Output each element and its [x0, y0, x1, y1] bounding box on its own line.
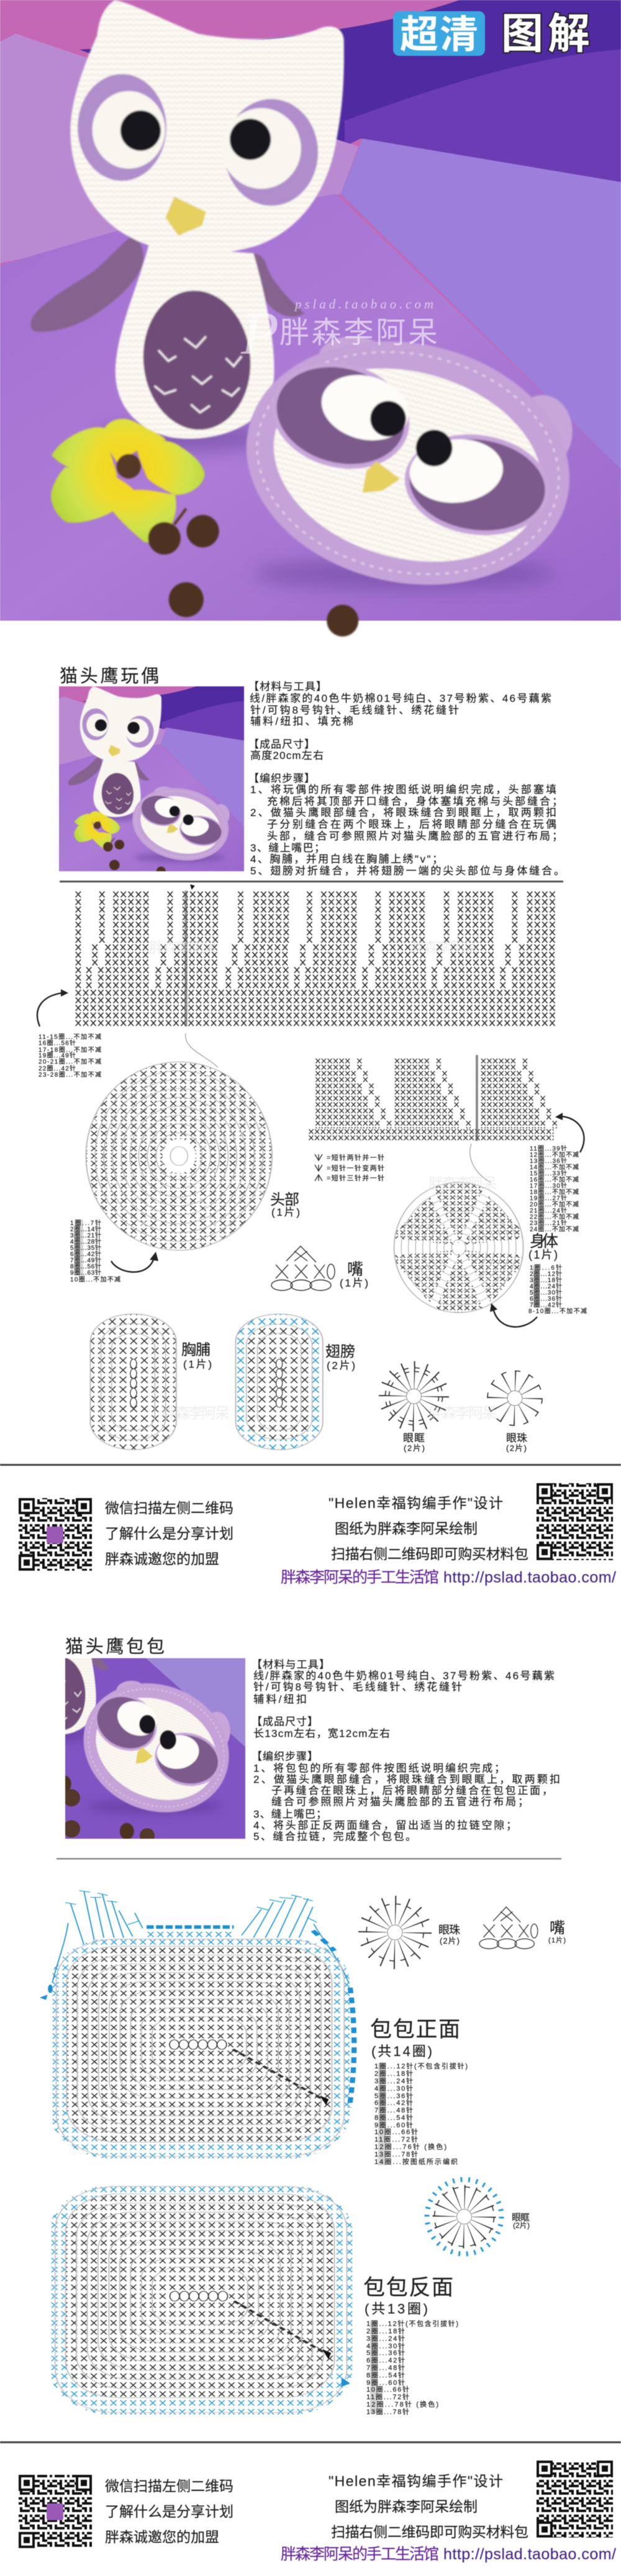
left promo text: 了解什么是分享计划 — [105, 2503, 233, 2520]
QR code: right — [537, 2461, 613, 2538]
list: body rounds 11-24: 19圈...27针 — [530, 1194, 567, 1202]
list: body rounds 11-24: 23圈...21针 — [530, 1219, 567, 1227]
left promo text — [105, 1500, 233, 1567]
label: 嘴 — [548, 1919, 566, 1944]
materials and steps text — [252, 1659, 560, 1842]
diagram watermarks: 胖森李阿呆 — [161, 1405, 230, 1422]
label: 头部: 头部 — [270, 1192, 299, 1208]
label: 翅膀: (2片) — [327, 1360, 355, 1371]
list: pouch back rounds: 6圈...42针 — [366, 2356, 405, 2364]
list: body rounds 1-10: 8-10圈...不加不减 — [528, 1308, 587, 1315]
diagram watermarks — [149, 940, 497, 1422]
stitch legend — [315, 1153, 384, 1182]
list: head rounds 11-28 — [39, 1033, 101, 1079]
pouch front ears — [52, 1891, 348, 1983]
mouth diagram — [271, 1246, 335, 1291]
chart: wing piece — [235, 1314, 323, 1450]
list: head rounds 11-28: 19圈...49针 — [39, 1051, 76, 1059]
list: pouch front rounds: 14圈...按图纸所示编织 — [374, 2157, 458, 2166]
arrowhead: grid start — [61, 989, 68, 997]
materials and steps text: 【成品尺寸】 — [248, 738, 315, 750]
arrowhead: body chart — [490, 1303, 497, 1312]
arrow: to body chart — [494, 1311, 537, 1327]
materials and steps text: 【材料与工具】 — [252, 1659, 330, 1671]
list: body rounds 11-24: 22圈...不加不减 — [530, 1213, 579, 1221]
list: head rounds 11-28: 11-15圈...不加不减 — [39, 1033, 101, 1041]
label: 翅膀 — [325, 1344, 355, 1371]
list: pouch front rounds: 5圈...36针 — [374, 2091, 413, 2100]
list: pouch front rounds: 1圈...12针(不包含引拔针) — [374, 2062, 468, 2070]
list: body rounds 1-10: 3圈...18针 — [530, 1276, 562, 1284]
hero photo: crochet owl toy and owl pouch — [0, 0, 621, 637]
label: 头部: (1片) — [271, 1206, 300, 1218]
footer promo block 2 — [19, 2461, 616, 2563]
list: head rounds 1-10: 6圈...42针 — [70, 1250, 101, 1258]
materials and steps text: 高度20cm左右 — [250, 750, 324, 761]
connector: grid to head chart — [186, 1033, 218, 1067]
list: body rounds 11-24: 18圈...不加不减 — [530, 1188, 579, 1196]
title: 包包反面: 包包反面 — [363, 2276, 453, 2300]
right promo text: 图纸为胖森李阿呆绘制 — [335, 2498, 478, 2515]
right promo text — [329, 2473, 528, 2540]
list: pouch back rounds: 11圈...72针 — [366, 2392, 409, 2401]
list: body rounds 11-24: 11圈...39针 — [530, 1144, 567, 1152]
label: 眼眶: 眼眶 — [512, 2212, 530, 2223]
list: head rounds 1-10: 3圈...21针 — [70, 1231, 101, 1239]
label: 眼眶: (2片) — [404, 1443, 425, 1453]
chart: eyeball — [487, 1371, 542, 1425]
list: head rounds 1-10: 1圈...7针 — [70, 1219, 101, 1227]
front eyeball with stitches — [361, 1898, 429, 1967]
panel: owl toy instructions — [59, 666, 564, 877]
list: pouch back rounds: 1圈...12针(不包含引拔针) — [366, 2319, 458, 2328]
list: pouch front rounds: 2圈...18针 — [374, 2069, 413, 2078]
photo watermark: pslad.taobao.com — [294, 297, 433, 312]
right promo text — [329, 1495, 528, 1562]
label: 嘴: (1片) — [340, 1277, 368, 1289]
list: body rounds 11-24: 21圈...24针 — [530, 1206, 567, 1214]
materials and steps text: 3、缝上嘴巴； — [250, 842, 325, 854]
list: head rounds 11-28: 20-21圈...不加不减 — [39, 1058, 101, 1066]
list: body rounds 11-24 — [530, 1144, 579, 1233]
chart: chest piece — [90, 1314, 176, 1450]
pouch photo — [65, 1658, 246, 1839]
left promo text: 胖森诚邀您的加盟 — [105, 2529, 219, 2545]
label: 眼珠: (2片) — [440, 1936, 460, 1945]
materials and steps text: 【材料与工具】 — [248, 681, 327, 693]
list: pouch front rounds: 7圈...48针 — [374, 2106, 413, 2114]
stitch legend: =短针一针变两针 — [327, 1164, 384, 1172]
label: 眼珠: 眼珠 — [438, 1924, 460, 1936]
photo watermark: 胖森李阿呆 — [279, 316, 438, 349]
QR code: right — [537, 1483, 613, 1560]
label: 眼眶: (2片) — [513, 2221, 530, 2230]
list: body rounds 1-10: 7圈...42针 — [530, 1301, 562, 1309]
label: 头部 — [270, 1192, 300, 1218]
materials and steps text: 线/胖森家的40色牛奶棉01号纯白、37号粉紫、46号藕紫 — [253, 1670, 555, 1682]
list: body rounds 1-10: 6圈...36针 — [530, 1295, 562, 1303]
left promo text: 微信扫描左侧二维码 — [105, 1500, 233, 1516]
subtitle: 共14圈: (共14圈) — [371, 2044, 432, 2059]
list: pouch front rounds: 10圈...66针 — [374, 2127, 418, 2136]
badge: 超清: 超清 — [400, 14, 478, 56]
diagram watermarks: 胖森李阿呆 — [428, 1405, 497, 1422]
label: 嘴: (1片) — [548, 1936, 566, 1944]
label: 身体 — [528, 1232, 558, 1261]
right promo text: 扫描右侧二维码即可购买材料包 — [331, 2524, 528, 2540]
list: pouch front rounds: 12圈...76针 (换色) — [374, 2142, 446, 2151]
list: body rounds 11-24: 14圈...不加不减 — [530, 1164, 579, 1171]
list: head rounds 1-10: 7圈...49针 — [70, 1256, 101, 1264]
materials and steps text: 2、做猫头鹰眼部缝合，将眼珠缝合到眼眶上，取两颗扣 — [250, 807, 556, 819]
back eye socket with blue edge — [427, 2179, 502, 2254]
materials and steps text: 线/胖森家的40色牛奶棉01号纯白、37号粉紫、46号藕紫 — [250, 693, 551, 704]
list: pouch back rounds: 13圈...78针 — [366, 2407, 409, 2416]
list: head rounds 1-10 — [70, 1219, 120, 1283]
list: pouch back rounds: 9圈...60针 — [366, 2378, 405, 2387]
label: 嘴: 嘴 — [550, 1919, 565, 1937]
footer promo block 1 — [19, 1483, 616, 1586]
list: pouch back rounds: 5圈...36针 — [366, 2348, 405, 2357]
right promo text: 扫描右侧二维码即可购买材料包 — [331, 1546, 528, 1562]
chart: head round diagram — [79, 1061, 277, 1254]
label: 嘴: 嘴 — [347, 1260, 363, 1278]
materials and steps text: 4、将头部正反两面缝合，留出适当的拉链空隙； — [253, 1820, 517, 1831]
list: body rounds 11-24: 20圈...不加不减 — [530, 1201, 579, 1208]
right promo text: "Helen幸福钩编手作"设计 — [329, 2473, 503, 2489]
materials and steps text: 1、将玩偶的所有零部件按图纸说明编织完成，头部塞填 — [250, 784, 556, 796]
materials and steps text: 充棉后将其顶部开口缝合，身体塞填充棉与头部缝合； — [267, 796, 563, 807]
chart: body round diagram — [390, 1180, 528, 1314]
materials and steps text: 辅料/纽扣 — [253, 1694, 307, 1705]
materials and steps text: 【编织步骤】 — [248, 773, 315, 784]
list: pouch back rounds: 4圈...30针 — [366, 2341, 405, 2350]
chart: eye socket — [381, 1363, 447, 1429]
materials and steps text: 辅料/纽扣、填充棉 — [250, 716, 353, 727]
list: body rounds 11-24: 16圈...不加不减 — [530, 1176, 579, 1183]
diagram watermarks: 胖森李阿呆 — [149, 940, 217, 956]
label: 身体: (1片) — [528, 1249, 558, 1261]
materials and steps text: 1、将包包的所有零部件按图纸说明编织完成； — [253, 1762, 505, 1774]
panel: owl pouch instructions — [65, 1636, 560, 1842]
list: pouch back rounds: 10圈...66针 — [366, 2385, 409, 2394]
label: 眼珠: 眼珠 — [506, 1432, 527, 1444]
label: 嘴 — [340, 1260, 368, 1289]
label: 眼珠 — [438, 1924, 460, 1945]
mouth diagram — [479, 1907, 538, 1949]
materials and steps text: 【成品尺寸】 — [252, 1716, 318, 1728]
label: 身体: 身体 — [530, 1232, 558, 1250]
list: pouch front rounds: 9圈...60针 — [374, 2120, 413, 2129]
QR code: left — [19, 2475, 92, 2548]
chart: pouch back — [50, 2185, 353, 2415]
list: head rounds 11-28: 16圈...56针 — [39, 1039, 76, 1047]
materials and steps text: 子分别缝合在两个眼珠上，后将眼睛部分缝合在玩偶 — [267, 819, 556, 830]
materials and steps text: 5、缝合拉链，完成整个包包。 — [253, 1831, 416, 1842]
toy photo — [59, 686, 244, 876]
label: 翅膀: 翅膀 — [325, 1344, 355, 1360]
list: head rounds 1-10: 4圈...28针 — [70, 1237, 101, 1245]
list: body rounds 11-24: 13圈...36针 — [530, 1157, 567, 1165]
label: 胸脯 — [181, 1342, 212, 1370]
heading: 猫头鹰包包: 猫头鹰包包 — [65, 1636, 165, 1657]
title: 包包正面: 包包正面 — [370, 2017, 460, 2042]
list: pouch back rounds: 12圈...78针 (换色) — [366, 2400, 438, 2408]
list: pouch front rounds: 6圈...42针 — [374, 2098, 413, 2107]
list: body rounds 1-10: 5圈...30针 — [530, 1288, 562, 1296]
shop link: http://pslad.taobao.com/ — [443, 1569, 616, 1586]
chart: neck and body stitch grid — [75, 884, 556, 1027]
list: body rounds 11-24: 12圈...不加不减 — [530, 1151, 579, 1159]
list: pouch front rounds: 11圈...72针 — [374, 2135, 418, 2143]
label: 眼眶 — [403, 1432, 425, 1453]
list: head rounds 11-28: 22圈...42针 — [39, 1064, 76, 1072]
right promo text: 图纸为胖森李阿呆绘制 — [335, 1520, 478, 1537]
list: head rounds 1-10: 5圈...35针 — [70, 1244, 101, 1252]
materials and steps text: 针/可钩8号钩针、毛线缝针、绣花缝针 — [253, 1681, 462, 1693]
badge: 图解: 图解 — [501, 11, 590, 58]
list: body rounds 1-10: 1圈...6针 — [530, 1263, 562, 1272]
photo watermark — [240, 297, 438, 367]
label: 眼眶: 眼眶 — [403, 1432, 425, 1444]
diagram watermarks: 胖森李阿呆 — [410, 940, 478, 956]
stitch legend: =短针三针并一针 — [327, 1174, 384, 1182]
label: 眼珠: (2片) — [506, 1443, 527, 1453]
diagram watermarks: 胖森李阿呆 — [428, 1175, 497, 1192]
shop link: 胖森李阿呆的手工生活馆 — [281, 1569, 439, 1586]
stitch legend: =短针两针并一针 — [327, 1153, 384, 1162]
chart: pouch front — [40, 1891, 354, 2159]
list: head rounds 1-10: 10圈...不加不减 — [70, 1276, 120, 1283]
arrow: to body grid — [562, 1116, 584, 1152]
list: head rounds 1-10: 9圈...63针 — [70, 1268, 101, 1277]
arrowhead: body grid — [555, 1113, 563, 1120]
shop link — [281, 1569, 616, 1586]
list: body rounds 11-24: 15圈...33针 — [530, 1169, 567, 1177]
materials and steps text: 2、做猫头鹰眼部缝合，将眼珠缝合到眼眶上，取两颗扣 — [253, 1774, 560, 1785]
list: body rounds 1-10 — [528, 1263, 587, 1315]
materials and steps text: 4、胸脯，并用白线在胸脯上绣"v"； — [250, 853, 443, 865]
list: pouch front rounds — [374, 2062, 468, 2166]
materials and steps text: 针/可钩8号钩针、毛线缝针、绣花缝针 — [250, 704, 459, 716]
materials and steps text: 缝合可参照照片对猫头鹰脸部的五官进行布局； — [271, 1796, 528, 1808]
list: pouch back rounds — [366, 2319, 458, 2416]
materials and steps text: 【编织步骤】 — [252, 1751, 318, 1762]
list: head rounds 1-10: 8圈...56针 — [70, 1262, 101, 1270]
left promo text — [105, 2478, 233, 2545]
subtitle: 共13圈: (共13圈) — [365, 2301, 428, 2317]
shop link: 胖森李阿呆的手工生活馆 — [281, 2546, 439, 2563]
list: body rounds 1-10: 4圈...24针 — [530, 1282, 562, 1290]
list: pouch back rounds: 3圈...24针 — [366, 2334, 405, 2343]
arrow: to grid start — [37, 993, 62, 1026]
materials and steps text: 子再缝合在眼珠上，后将眼睛部分缝合在包包正面， — [271, 1785, 553, 1797]
left promo text: 微信扫描左侧二维码 — [105, 2478, 233, 2494]
label: 胸脯: (1片) — [183, 1358, 212, 1370]
list: body rounds 1-10: 2圈...12针 — [530, 1270, 562, 1278]
photo watermark: P — [240, 298, 279, 367]
arrowhead: head chart — [150, 1252, 158, 1261]
list: pouch back rounds: 7圈...48针 — [366, 2363, 405, 2372]
right promo text: "Helen幸福钩编手作"设计 — [329, 1495, 503, 1511]
list: pouch front rounds: 8圈...54针 — [374, 2113, 413, 2122]
list: pouch back rounds: 8圈...54针 — [366, 2371, 405, 2379]
list: body rounds 11-24: 24圈...不加不减 — [530, 1226, 579, 1233]
list: pouch front rounds: 4圈...30针 — [374, 2084, 413, 2093]
list: pouch front rounds: 13圈...78针 — [374, 2150, 418, 2158]
shop link — [281, 2546, 616, 2563]
left promo text: 胖森诚邀您的加盟 — [105, 1551, 219, 1567]
label: 胸脯: 胸脯 — [181, 1342, 211, 1358]
list: body rounds 11-24: 17圈...30针 — [530, 1182, 567, 1190]
QR code: left — [19, 1498, 92, 1571]
connector: grid to body chart — [470, 1144, 491, 1182]
list: head rounds 11-28: 23-28圈...不加不减 — [39, 1071, 101, 1079]
left promo text: 了解什么是分享计划 — [105, 1525, 233, 1542]
list: head rounds 11-28: 17-18圈...不加不减 — [39, 1046, 101, 1054]
materials and steps text: 头部，缝合可参照照片对猫头鹰脸部的五官进行布局； — [267, 830, 563, 842]
list: pouch front rounds: 3圈...24针 — [374, 2076, 413, 2085]
materials and steps text — [248, 681, 564, 877]
label: 眼眶 — [512, 2212, 530, 2230]
heading: 猫头鹰玩偶: 猫头鹰玩偶 — [60, 666, 159, 686]
arrow: to head chart — [111, 1260, 153, 1272]
materials and steps text: 3、缝上嘴巴； — [253, 1808, 327, 1820]
label: 眼珠 — [506, 1432, 527, 1453]
shop link: http://pslad.taobao.com/ — [443, 2546, 616, 2563]
list: head rounds 1-10: 2圈...14针 — [70, 1225, 101, 1233]
list: pouch back rounds: 2圈...18针 — [366, 2327, 405, 2335]
materials and steps text: 5、翅膀对折缝合，并将翅膀一端的尖头部位与身体缝合。 — [250, 865, 564, 877]
chart: body top stitch grid — [308, 1055, 558, 1141]
materials and steps text: 长13cm左右，宽12cm左右 — [253, 1728, 390, 1739]
